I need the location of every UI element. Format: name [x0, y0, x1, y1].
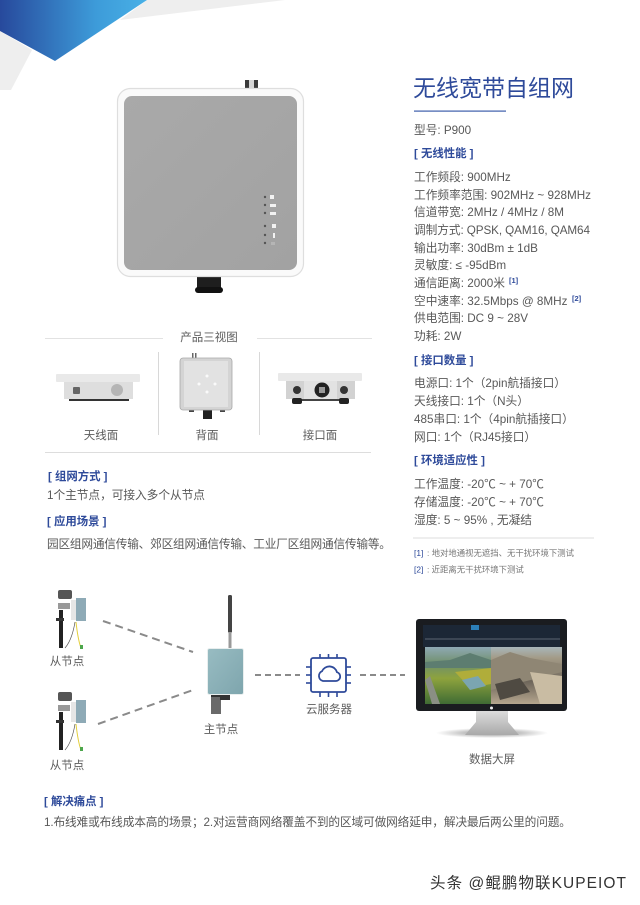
footnotes: [2] [414, 564, 423, 574]
wireless performance list: [1] [509, 276, 519, 285]
label: 主节点 [204, 723, 238, 736]
body: 园区组网通信传输、郊区组网通信传输、工业厂区组网通信传输等。 [47, 537, 391, 551]
view: interface face [278, 373, 362, 442]
screen: quarry [491, 647, 562, 704]
wireless performance list: 信道带宽: 2MHz / 4MHz / 8M [414, 205, 564, 219]
monitor [416, 619, 567, 766]
label: 背面 [196, 428, 218, 442]
wireless performance list: 供电范围: DC 9 ~ 28V [414, 311, 528, 325]
label: 从节点 [50, 655, 84, 668]
wireless performance list: 输出功率: 30dBm ± 1dB [414, 241, 538, 255]
view: antenna face [56, 374, 140, 442]
wireless performance list: [2] [572, 294, 582, 303]
environment list: 存储温度: -20℃ ~ + 70℃ [414, 495, 544, 509]
body: 1.布线难或布线成本高的场景；2.对运营商网络覆盖不到的区域可做网络延申，解决最后两公里的问题。 [44, 815, 571, 829]
environment list [414, 477, 544, 527]
wireless performance list: 工作频段: 900MHz [414, 170, 511, 184]
wireless performance list: 灵敏度: ≤ -95dBm [414, 258, 506, 272]
label: 从节点 [50, 759, 84, 772]
heading: [ 组网方式 ] [48, 469, 108, 483]
decorative corner: gray and blue shards [0, 0, 285, 90]
three views heading: 产品三视图 [180, 330, 238, 344]
label: 数据大屏 [469, 752, 515, 766]
application scenarios [47, 514, 391, 551]
title underline [414, 110, 506, 112]
slave node 2 [50, 692, 86, 772]
interface list: 网口: 1个（RJ45接口） [414, 430, 536, 444]
label: 天线面 [84, 428, 118, 442]
cloud server icon [306, 654, 352, 716]
master node [204, 595, 244, 736]
interface list: 485串口: 1个（4pin航插接口） [414, 412, 574, 426]
model: 型号: P900 [414, 123, 472, 137]
heading: interface count: [ 接口数量 ] [414, 353, 474, 367]
network diagram links [98, 621, 405, 724]
environment list: 工作温度: -20℃ ~ + 70℃ [414, 477, 544, 491]
watermark: 头条 @鲲鹏物联KUPEIOT [430, 874, 627, 892]
networking mode [47, 469, 205, 502]
footnotes: [1] [414, 548, 423, 558]
wireless performance list: 调制方式: QPSK, QAM16, QAM64 [414, 223, 590, 237]
label: 接口面 [303, 429, 337, 442]
footnotes: : 地对地通视无遮挡、无干扰环境下测试 [427, 548, 575, 558]
pain points [44, 794, 571, 829]
wireless performance list: 通信距离: 2000米 [414, 276, 505, 290]
body: 1个主节点，可接入多个从节点 [47, 488, 205, 502]
label: 云服务器 [306, 702, 352, 716]
interface list: 电源口: 1个（2pin航插接口） [414, 376, 566, 390]
footnotes [414, 548, 575, 574]
wireless performance list: 空中速率: 32.5Mbps @ 8MHz [414, 294, 568, 308]
view: back [180, 353, 232, 442]
product photo: radio unit front [118, 80, 304, 293]
interface list: 天线接口: 1个（N头） [414, 394, 529, 408]
screen: landscape [425, 647, 491, 704]
wireless performance list: 工作频率范围: 902MHz ~ 928MHz [414, 188, 591, 202]
footnotes: : 近距离无干扰环境下测试 [427, 564, 524, 574]
heading: [ 应用场景 ] [47, 514, 107, 528]
wireless performance list [414, 170, 591, 343]
heading: [ 解决痛点 ] [44, 794, 104, 808]
heading: wireless performance: [ 无线性能 ] [414, 146, 474, 160]
environment list: 湿度: 5 ~ 95% , 无凝结 [414, 513, 532, 527]
slave node 1 [50, 590, 86, 668]
interface list [414, 376, 574, 444]
heading: environment: [ 环境适应性 ] [414, 453, 485, 467]
spec column [414, 123, 591, 527]
title: 无线宽带自组网 [413, 75, 574, 101]
wireless performance list: 功耗: 2W [414, 330, 461, 343]
